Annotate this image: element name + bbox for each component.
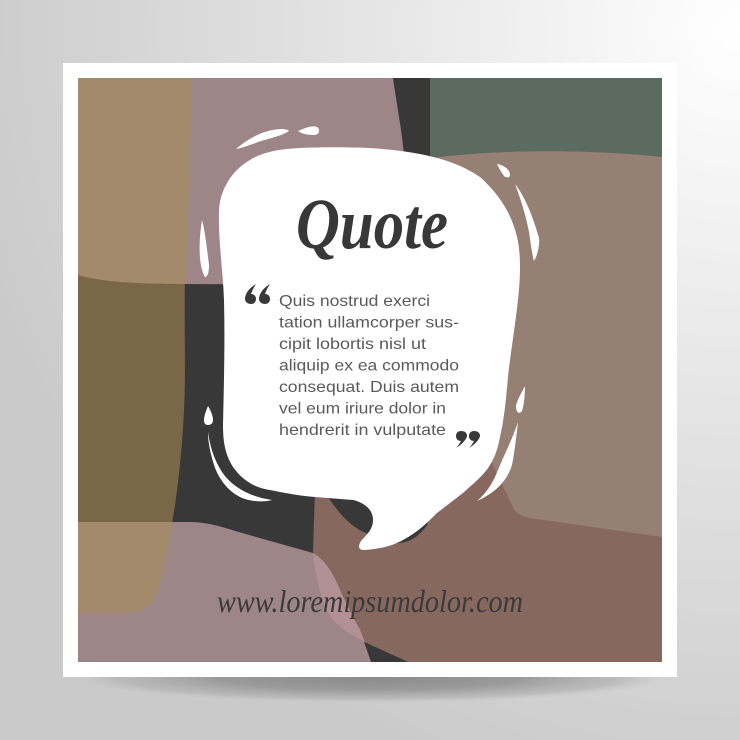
block: dark bottom wedge — [364, 642, 408, 662]
quote body text: consequat. Duis autem — [279, 379, 459, 396]
accent: right lower drop — [516, 386, 525, 413]
block: lower tan — [78, 522, 172, 613]
panel: abstract colour blocks — [78, 78, 662, 662]
block: dark behind tail — [328, 490, 428, 543]
icon: opening quotation mark — [245, 284, 270, 304]
website url: www.loremipsumdolor.com — [217, 583, 523, 619]
quote body text: aliquip ex ea commodo — [279, 358, 459, 374]
accent: right stroke — [515, 184, 539, 261]
quote body text: Quis nostrud exerci — [279, 293, 430, 310]
accent: left stroke — [200, 220, 209, 277]
card shadow — [70, 651, 670, 703]
block: light brown — [430, 151, 662, 537]
block: pink overlap — [313, 553, 365, 642]
accent: right drop — [497, 164, 510, 177]
quote body text: tation ullamcorper sus- — [279, 314, 459, 332]
accent: left lower drop — [204, 406, 213, 425]
icon: closing quotation mark — [456, 431, 480, 448]
block: dark olive — [78, 275, 185, 523]
accent: top drop — [298, 126, 319, 135]
block: dark brown — [313, 430, 662, 662]
quote body text: vel eum iriure dolor in — [279, 400, 446, 418]
quote body text: cipit lobortis nisl ut — [279, 336, 427, 353]
white card frame — [63, 63, 677, 677]
block: bottom mauve — [78, 522, 371, 662]
block: green — [430, 78, 662, 158]
highlight accents — [200, 126, 539, 501]
accent: right lower stroke — [477, 422, 518, 501]
block: tan top — [78, 78, 192, 284]
accent: left lower curve — [208, 432, 272, 501]
accent: top stroke — [236, 129, 289, 149]
speech bubble — [219, 147, 520, 550]
quote body text — [279, 293, 459, 439]
block: mauve top — [185, 78, 404, 285]
title: Quote — [296, 184, 448, 264]
quote body text: hendrerit in vulputate — [279, 422, 446, 439]
